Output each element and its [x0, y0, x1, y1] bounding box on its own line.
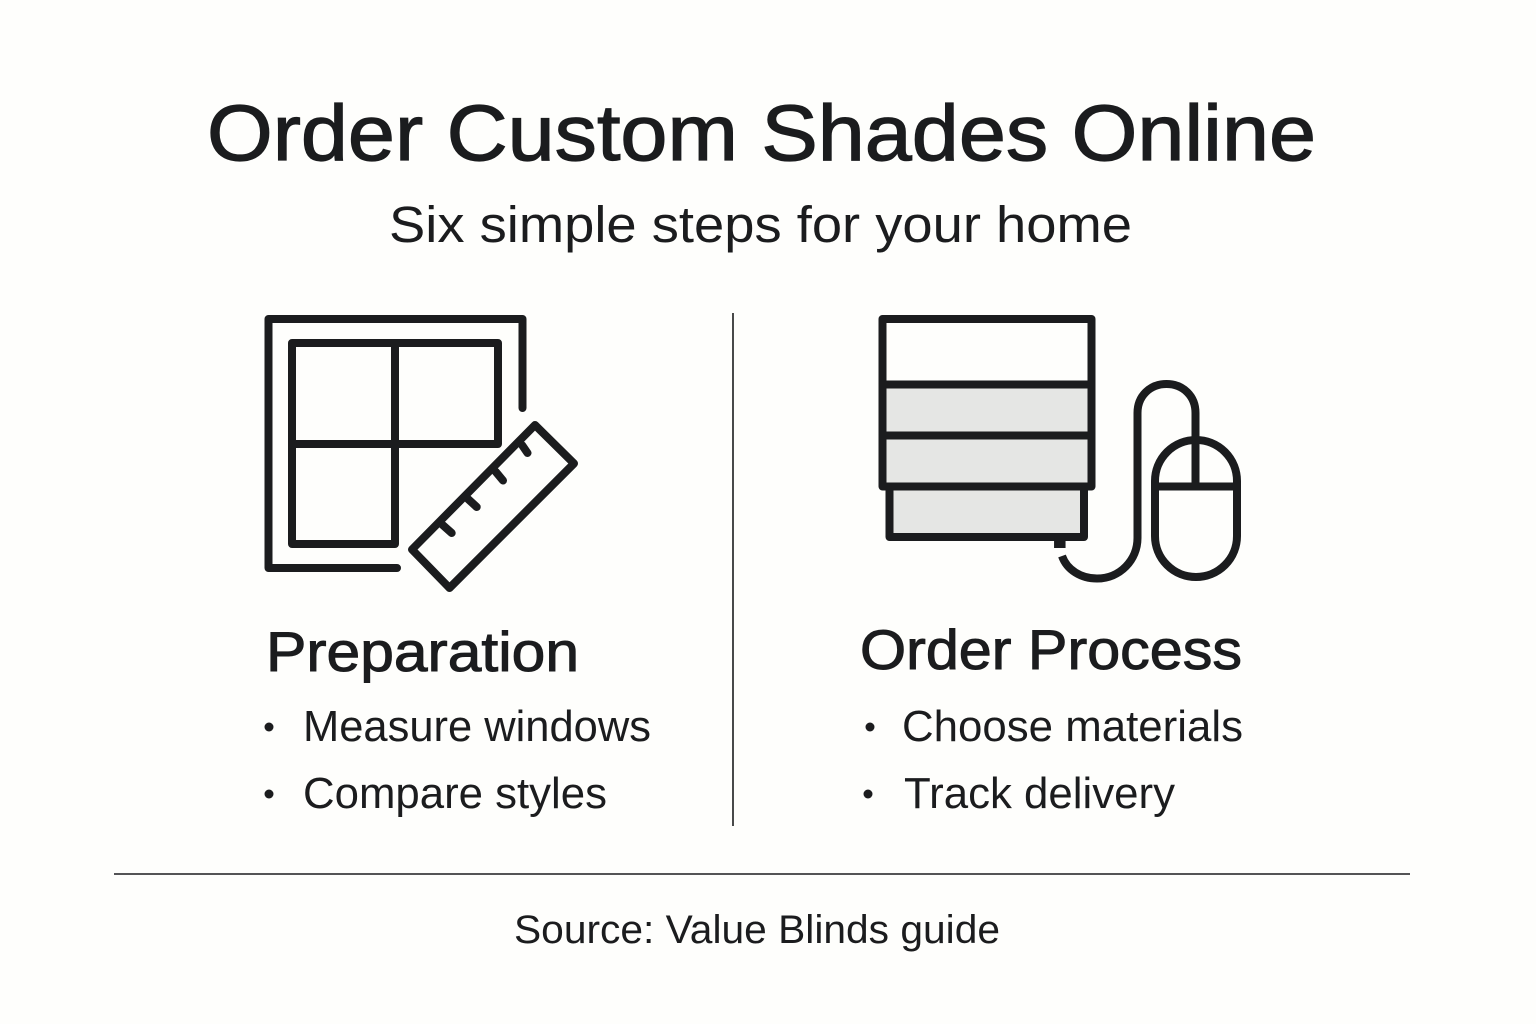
list: preparation steps: Compare styles: [303, 769, 607, 818]
list: order steps: [864, 702, 1243, 818]
subtitle: Six simple steps for your home: [389, 196, 1132, 253]
list: preparation steps: Measure windows: [303, 702, 651, 751]
list: order steps: Choose materials: [902, 702, 1243, 751]
panel divider: [732, 313, 734, 826]
footer rule: [114, 873, 1410, 875]
heading: Preparation: Preparation: [266, 620, 579, 683]
title: Order Custom Shades Online: [207, 88, 1316, 177]
heading: Order Process: Order Process: [860, 618, 1242, 681]
list: order steps: Track delivery: [904, 769, 1175, 818]
icon: shade and mouse: [882, 319, 1237, 578]
source note: Source: Value Blinds guide: [514, 908, 1000, 952]
icon: window and ruler: [268, 319, 574, 588]
list: preparation steps: [264, 702, 651, 818]
